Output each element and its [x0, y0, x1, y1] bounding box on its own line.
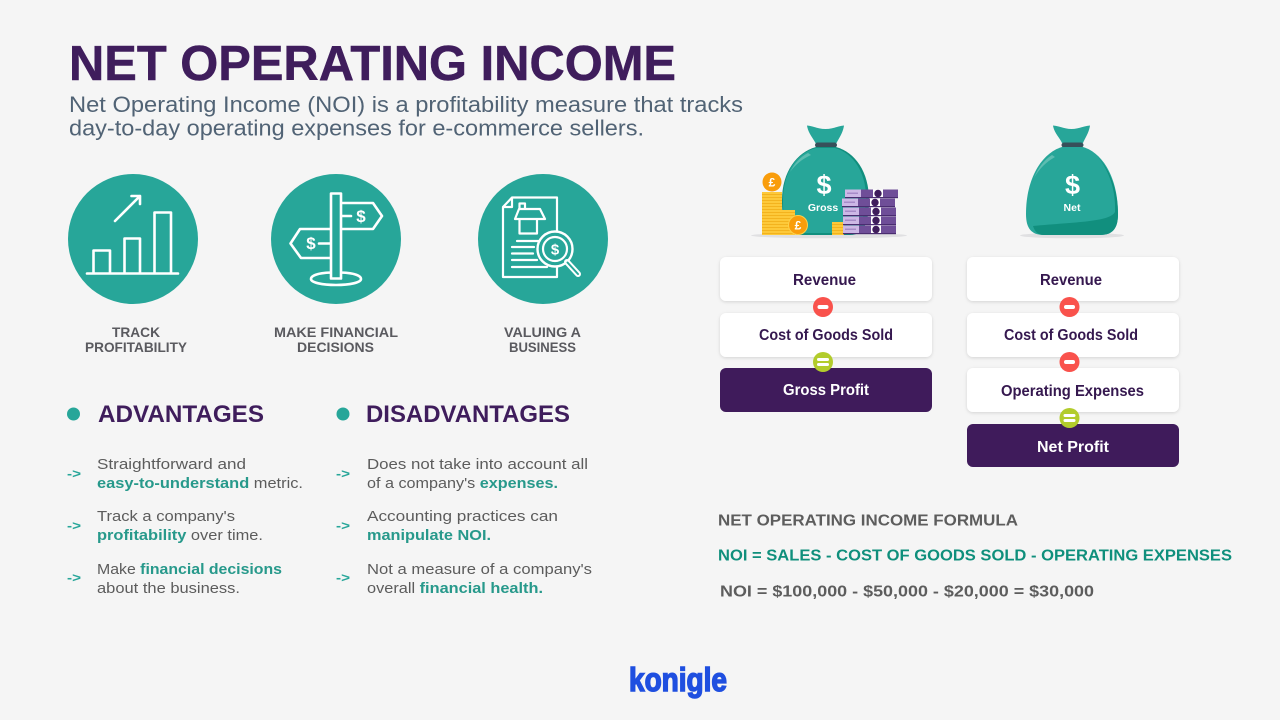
icon: signpost	[271, 174, 401, 304]
disadvantage 2: Accounting practices can	[367, 508, 558, 525]
advantage 1: ->	[67, 466, 81, 481]
label: make financial decisions: DECISIONS	[297, 339, 374, 355]
box: gross profit: Gross Profit	[783, 382, 869, 399]
icon: signpost: $	[306, 234, 316, 253]
disadvantage 1: Does not take into account all	[367, 456, 588, 473]
heading: disadvantages: DISADVANTAGES	[366, 401, 570, 428]
box: cost of goods sold: Cost of Goods Sold	[759, 327, 893, 344]
operator: equals	[813, 352, 833, 372]
advantage 3	[67, 561, 282, 597]
disadvantage 2: ->	[336, 518, 350, 533]
label: track profitability: TRACK	[112, 324, 160, 340]
advantage 2: profitability over time.	[97, 527, 263, 544]
illustration: net money bag: Net	[1064, 202, 1081, 214]
box: cost of goods sold	[967, 313, 1179, 357]
box: revenue	[967, 257, 1179, 301]
advantage 3: ->	[67, 570, 81, 585]
illustration: gross money bag with coins and cash	[751, 126, 907, 238]
box: operating expenses: Operating Expenses	[1001, 383, 1144, 400]
heading: advantages: ADVANTAGES	[98, 401, 264, 428]
advantage 3: about the business.	[97, 580, 240, 597]
panel: disadvantages	[336, 401, 592, 597]
subtitle	[69, 92, 743, 140]
subtitle: Net Operating Income (NOI) is a profitability measure that tracks	[69, 92, 743, 117]
flow: gross profit	[720, 257, 932, 412]
icon: document with magnifier	[478, 174, 608, 304]
panel: track profitability	[68, 174, 198, 355]
disadvantage 1: ->	[336, 466, 350, 481]
panel: valuing a business	[478, 174, 608, 355]
panel: advantages	[67, 401, 303, 597]
operator: equals	[1060, 408, 1080, 428]
operator: minus	[813, 297, 833, 317]
illustration: net money bag: $	[1065, 170, 1080, 200]
label: valuing a business	[504, 324, 581, 355]
label: make financial decisions: MAKE FINANCIAL	[274, 324, 398, 340]
formula example: NOI = $100,000 - $50,000 - $20,000 = $30,000	[720, 584, 1094, 600]
formula definition: NOI = SALES - COST OF GOODS SOLD - OPERATING EXPENSES	[718, 548, 1232, 564]
disadvantage 1: of a company's expenses.	[367, 475, 558, 492]
box: net profit	[967, 424, 1179, 467]
illustration: gross money bag with coins and cash: Gross	[808, 202, 838, 214]
coin stacks: £	[769, 176, 776, 190]
box: operating expenses	[967, 368, 1179, 412]
title: NET OPERATING INCOME	[69, 37, 676, 91]
panel: make financial decisions	[271, 174, 401, 355]
coin stacks	[762, 172, 844, 235]
operator: minus	[1060, 297, 1080, 317]
icon: growth chart	[68, 174, 198, 304]
label: make financial decisions	[274, 324, 398, 355]
box: revenue: Revenue	[1040, 272, 1102, 289]
box: gross profit	[720, 368, 932, 412]
label: track profitability: PROFITABILITY	[85, 339, 188, 355]
box: revenue	[720, 257, 932, 301]
icon: document with magnifier: $	[551, 242, 560, 258]
disadvantage 3: Not a measure of a company's	[367, 561, 592, 578]
box: net profit: Net Profit	[1037, 439, 1109, 456]
flow: net profit	[967, 257, 1179, 467]
box: cost of goods sold	[720, 313, 932, 357]
disadvantage 2	[336, 508, 558, 544]
coin stacks: £	[795, 218, 802, 232]
advantage 2	[67, 508, 263, 544]
illustration: net money bag	[1020, 126, 1124, 238]
label: track profitability	[85, 324, 188, 355]
box: cost of goods sold: Cost of Goods Sold	[1004, 327, 1138, 344]
advantage 1	[67, 456, 303, 492]
advantage 1: easy-to-understand metric.	[97, 475, 303, 492]
label: valuing a business: VALUING A	[504, 324, 581, 340]
icon: signpost: $	[356, 207, 366, 226]
subtitle: day-to-day operating expenses for e-commerce sellers.	[69, 116, 644, 140]
disadvantage 1	[336, 456, 588, 492]
illustration: gross money bag with coins and cash: $	[816, 170, 832, 200]
advantage 1: Straightforward and	[97, 456, 246, 473]
box: revenue: Revenue	[793, 272, 856, 289]
disadvantage 3	[336, 561, 592, 597]
logo: konigle: konigle	[629, 661, 727, 698]
advantage 2: ->	[67, 518, 81, 533]
formula heading: NET OPERATING INCOME FORMULA	[718, 512, 1018, 530]
disadvantage 3: ->	[336, 570, 350, 585]
disadvantage 2: manipulate NOI.	[367, 527, 491, 544]
advantage 2: Track a company's	[97, 508, 235, 525]
panel: formula	[718, 512, 1232, 600]
disadvantage 3: overall financial health.	[367, 580, 543, 597]
operator: minus	[1060, 352, 1080, 372]
cash stacks	[842, 190, 898, 234]
label: valuing a business: BUSINESS	[509, 339, 576, 355]
advantage 3: Make financial decisions	[97, 561, 282, 578]
